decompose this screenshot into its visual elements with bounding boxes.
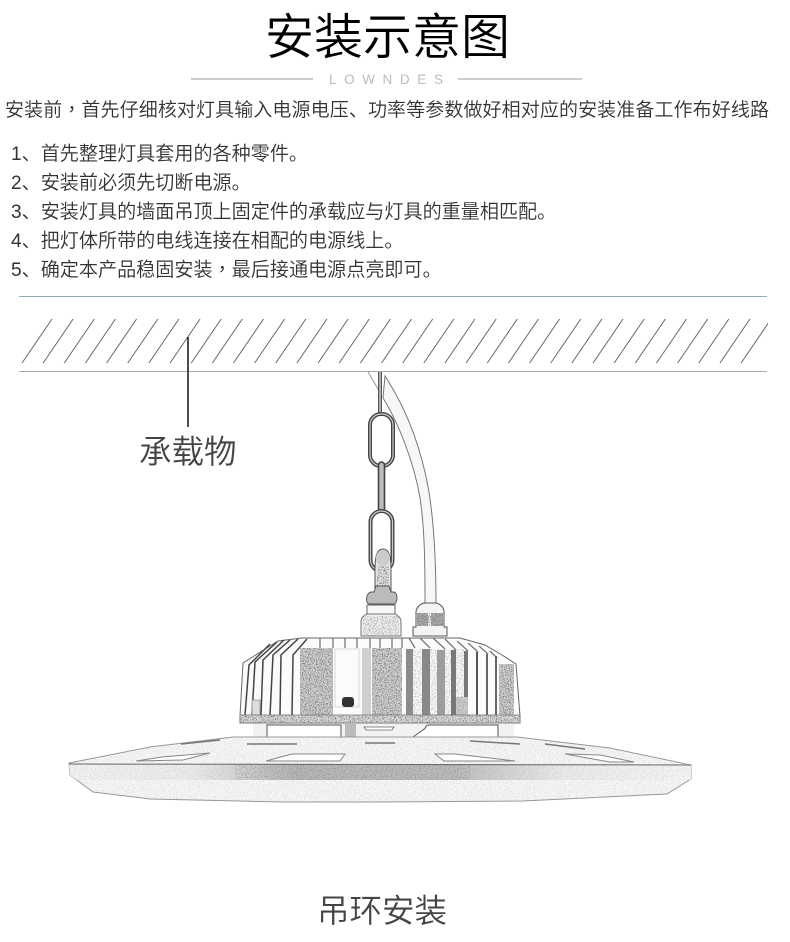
step 5: 5、确定本产品稳固安装，最后接通电源点亮即可。: [11, 259, 442, 281]
intro text: 安装前，首先仔细核对灯具输入电源电压、功率等参数做好相对应的安装准备工作布好线路: [5, 99, 769, 121]
title: 安装示意图: [265, 11, 510, 65]
shackle and nut: [367, 549, 397, 614]
small fin panel: [252, 700, 260, 715]
white label panel with badge: [335, 649, 359, 707]
speckled fin panels: [300, 648, 514, 715]
step 3: 3、安装灯具的墙面吊顶上固定件的承载应与灯具的重量相匹配。: [11, 201, 556, 223]
power cable: [383, 376, 436, 604]
lamp neck: [361, 614, 401, 636]
label: load-bearing surface: 承载物: [139, 434, 237, 470]
chain link upper: [370, 414, 393, 466]
step 4: 4、把灯体所带的电线连接在相配的电源线上。: [11, 230, 404, 252]
leader line to load-bearing label: [187, 337, 189, 427]
heat sink housing: [240, 638, 520, 723]
step 2: 2、安装前必须先切断电源。: [11, 172, 251, 194]
lamp disc reflector: [69, 737, 691, 802]
chain link lower: [370, 511, 392, 571]
hanging chain: [368, 372, 393, 571]
disc windows: [136, 753, 634, 762]
vertical fins left: [245, 639, 307, 715]
vertical fins right: [406, 649, 497, 715]
subtitle divider: LOWNDES: LOWNDES: [329, 72, 450, 87]
top ring fins: [320, 638, 497, 658]
hook: [368, 372, 381, 414]
top slots: [181, 740, 585, 749]
base band: [240, 715, 520, 723]
rim shaded band: [69, 764, 691, 780]
cable connector: [413, 603, 447, 636]
ceiling: hatched load-bearing surface: [19, 296, 771, 372]
step 1: 1、首先整理灯具套用的各种零件。: [11, 143, 308, 165]
mounting gap with windows: [253, 724, 514, 739]
instruction list: [11, 143, 556, 281]
caption: ring mount: 吊环安装: [317, 893, 447, 929]
chain link middle: [378, 462, 384, 512]
